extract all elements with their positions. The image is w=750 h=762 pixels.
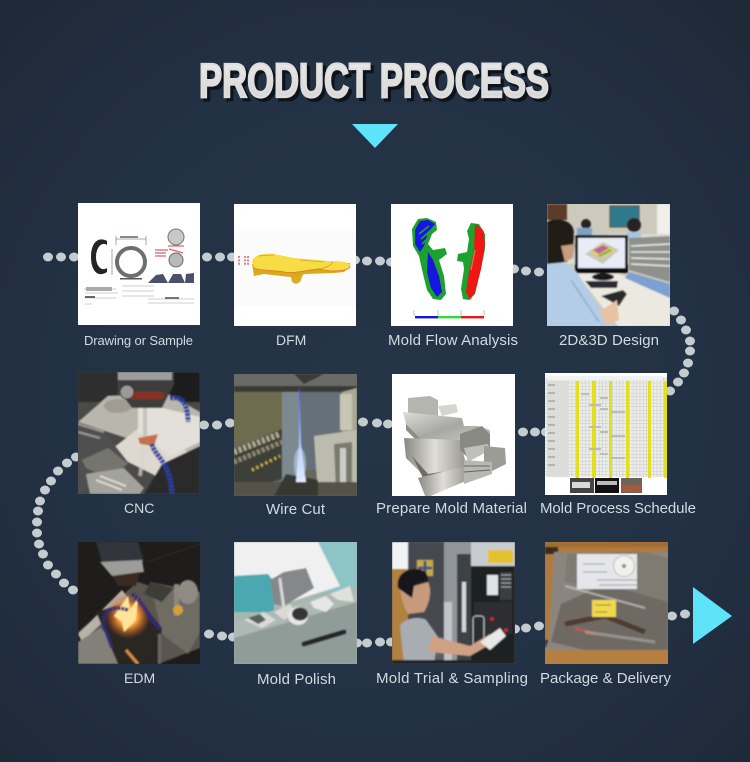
caption: Wire Cut: [266, 501, 326, 518]
title: PRODUCT PROCESS: [199, 55, 552, 111]
image: technical drawing: [78, 203, 200, 325]
panel: Wire Cut: [234, 374, 357, 518]
image: flow simulation: [391, 204, 513, 326]
caption: Mold Process Schedule: [540, 500, 696, 517]
image: steel blocks: [392, 374, 515, 496]
image: CNC machining: [78, 372, 200, 494]
caption: EDM: [124, 670, 155, 686]
panel: Mold Polish: [234, 542, 357, 688]
caption: CNC: [124, 500, 154, 516]
panel: Package & Delivery: [540, 542, 672, 687]
panel: 2D&3D Design: [547, 204, 670, 349]
panel: DFM: [234, 204, 356, 348]
title: PRODUCT PROCESS: PRODUCT PROCESS: [199, 55, 549, 108]
panel: Prepare Mold Material: [376, 374, 527, 517]
caption: Drawing or Sample: [84, 333, 193, 348]
image: wire cutting: [234, 374, 357, 496]
panel: Mold Process Schedule: [540, 373, 696, 517]
image: schedule table: [545, 373, 667, 495]
arrow: down triangle: [352, 124, 398, 148]
caption: DFM: [276, 332, 306, 348]
dotted process path: [32, 252, 695, 648]
panel: EDM: [78, 542, 200, 686]
image: packed mold in crate: [545, 542, 668, 664]
caption: Mold Polish: [257, 671, 336, 688]
panel: Drawing or Sample: [78, 203, 200, 348]
image: mold polishing: [234, 542, 357, 664]
panel: Mold Trial & Sampling: [376, 542, 528, 687]
caption: Mold Trial & Sampling: [376, 670, 528, 687]
arrow: right triangle: [693, 587, 732, 644]
caption: Mold Flow Analysis: [388, 332, 518, 349]
panel: CNC: [78, 372, 200, 516]
caption: 2D&3D Design: [559, 332, 659, 349]
image: EDM sparks: [78, 542, 200, 664]
caption: Prepare Mold Material: [376, 500, 527, 517]
caption: Package & Delivery: [540, 670, 672, 687]
image: yellow part model: [234, 204, 356, 326]
image: engineer at workstation: [547, 204, 670, 326]
title: PRODUCT PROCESS: PRODUCT PROCESS: [202, 58, 552, 111]
image: operator at machine: [392, 542, 515, 664]
panel: Mold Flow Analysis: [388, 204, 518, 349]
